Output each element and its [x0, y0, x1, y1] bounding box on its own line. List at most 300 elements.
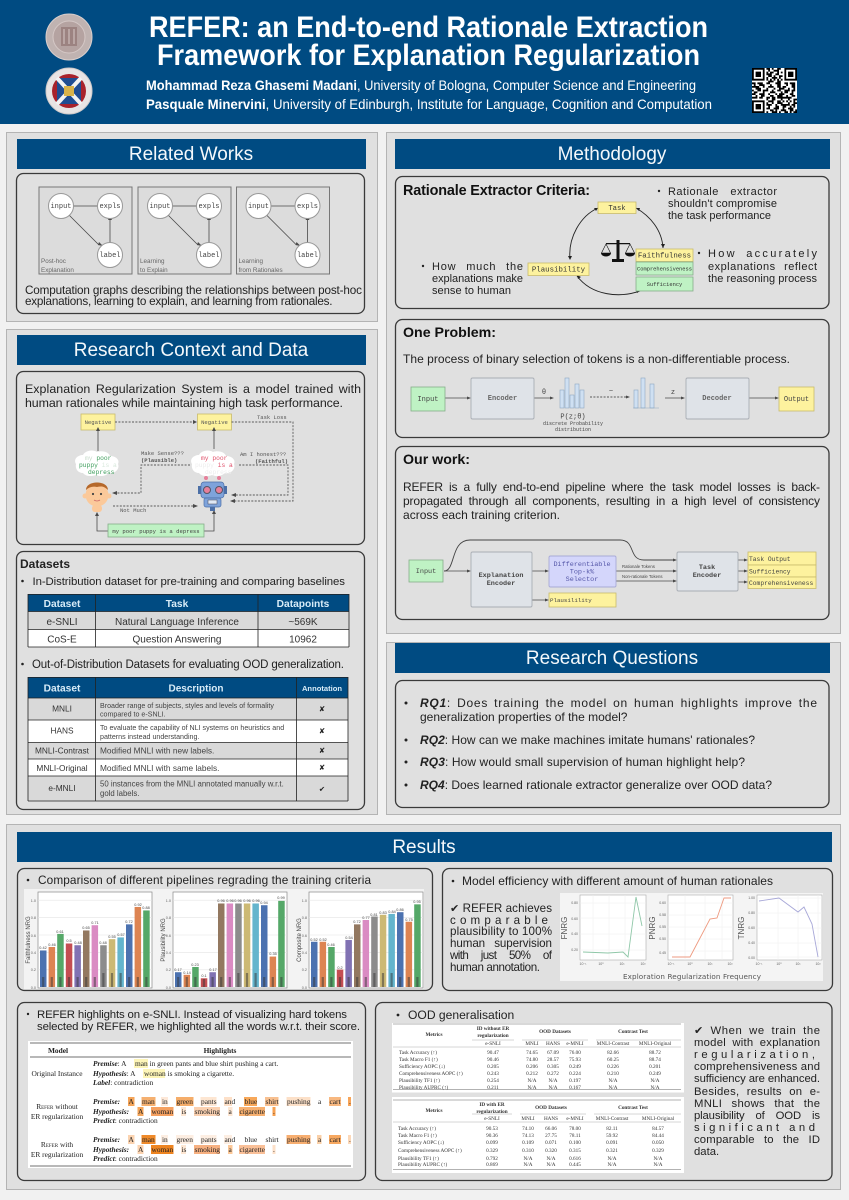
table: ID without ER regularization: N/A [651, 1085, 660, 1091]
text: refer pipeline description: across each training criterion. [403, 508, 560, 522]
pipeline diagram: non-differentiable: distribution [555, 427, 591, 433]
table: ID with ER regularization [393, 1100, 681, 1170]
line chart: TNRG: 0.80 [748, 911, 755, 915]
table: ID with ER regularization: Comprehensiveness AOPC (↑) [398, 1147, 462, 1154]
line chart: PNRG: 0.45 [659, 951, 666, 955]
line chart: TNRG: 10¹ [795, 962, 801, 966]
line chart: PNRG: PNRG [648, 916, 657, 940]
bar chart: composite NRG: 0.46 [327, 943, 335, 947]
bullet: faithfulness [698, 248, 818, 285]
table: out-of-distribution datasets: To evaluate the capability of NLI systems on heuristics and [100, 724, 284, 732]
bar chart: plausibility NRG: 0.96 [217, 899, 225, 903]
line chart: FNRG: 10¹ [619, 962, 625, 966]
bar chart: faithfulness NRG: 0.88 [142, 906, 150, 910]
table: ID without ER regularization: N/A [528, 1078, 537, 1084]
bullet: task performance [658, 186, 777, 222]
table: highlight examples: Model [48, 1046, 68, 1055]
pipeline diagram: non-differentiable [411, 378, 814, 433]
panel: results [6, 824, 840, 1190]
text: OOD findings: Besides, results on e- [694, 1086, 820, 1098]
diagram: explanation regularization system: Not Much [120, 507, 146, 514]
panel: one problem [396, 320, 829, 438]
table: ID without ER regularization: 74.80 [526, 1057, 538, 1063]
diagram: learning from rationales graph: Learning [238, 258, 264, 265]
text: OOD findings: significant and [694, 1122, 820, 1134]
bar chart: plausibility NRG: 0.96 [243, 899, 251, 903]
table: out-of-distribution datasets: ✘ [319, 704, 325, 714]
table: ID without ER regularization: 0.226 [607, 1064, 619, 1070]
row: refer without ER regularization: is [182, 1107, 187, 1116]
text: explanation regularization system: human rationales while maintaining high task performance. [25, 396, 343, 410]
table: out-of-distribution datasets: Annotation [302, 684, 342, 693]
row: refer with ER regularization: in [162, 1135, 168, 1144]
row: refer without ER regularization: A [128, 1097, 134, 1106]
line chart: TNRG: TNRG [737, 917, 746, 939]
icon: QR code [752, 68, 797, 113]
row: refer with ER regularization: man [142, 1135, 155, 1144]
row: refer without ER regularization: Predict: contradiction [93, 1116, 158, 1125]
cloud: machine rationale: my poor [201, 455, 228, 462]
text: OOD findings: data. [694, 1146, 719, 1158]
header banner [0, 0, 849, 124]
line chart: TNRG: 10² [815, 962, 821, 966]
table: ID with ER regularization: 0.329 [486, 1148, 498, 1154]
authors [146, 78, 712, 112]
diagram: learning to explain graph: to Explain [140, 267, 168, 274]
diagram: learning from rationales graph: expls [297, 203, 318, 211]
bullet: task performance: Rationale extractor [668, 186, 777, 198]
bullet: plausibility [422, 261, 523, 297]
bar chart: plausibility NRG: 0.8 [166, 916, 171, 920]
bar chart: composite NRG: 1.0 [302, 899, 307, 903]
bar chart: plausibility NRG: 0.35 [269, 952, 277, 956]
text: OOD findings: comparable to the ID [694, 1134, 820, 1146]
row: refer without ER regularization: pushing [287, 1097, 311, 1106]
text: refer achieves comparable plausibility: with just 50% of [449, 949, 553, 962]
diagram: post-hoc explanation graph: Explanation [41, 267, 74, 274]
table: ID with ER regularization: 66.06 [545, 1126, 557, 1132]
line chart: PNRG: 0.58 [659, 913, 666, 917]
cycle diagram: Faithfulness [638, 252, 691, 260]
bar chart: faithfulness NRG: 0.65 [82, 926, 90, 930]
line chart: FNRG: 10⁰ [598, 962, 604, 966]
text: refer achieves comparable plausibility [449, 902, 553, 974]
pipeline diagram: refer: Input [416, 568, 436, 576]
table: ID without ER regularization: Contrast Test [618, 1029, 648, 1035]
row: refer without ER regularization: a [228, 1107, 232, 1116]
bar chart: faithfulness NRG: 0.0 [31, 986, 36, 990]
table: ID without ER regularization: 0.205 [487, 1064, 499, 1070]
input sentence box: my poor puppy is a depress [112, 528, 200, 535]
table: out-of-distribution datasets: Dataset [44, 684, 81, 694]
pipeline diagram: non-differentiable: P(z;θ) [560, 414, 586, 422]
cloud: human rationale: puppy is a [79, 462, 117, 469]
diagram: explanation regularization system: (Faithful) [255, 458, 288, 465]
caption: computation graphs: explanations, learning to explain, and learning from rationales. [25, 295, 332, 308]
table: out-of-distribution datasets: ✘ [319, 746, 325, 755]
table: ID with ER regularization: 0.109 [522, 1140, 534, 1146]
logo: University of Edinburgh crest [46, 68, 92, 114]
panel: model efficiency [442, 868, 832, 990]
table: ID without ER regularization: 90.46 [487, 1057, 499, 1063]
heading: datasets: Datasets [20, 557, 70, 571]
logo: University of Bologna seal [46, 14, 92, 60]
table: highlight examples: Highlights [204, 1046, 237, 1055]
panel: one problem: The process of binary selection of tokens is a non-differentiable process. [403, 352, 790, 366]
row: refer with ER regularization: woman [152, 1145, 174, 1154]
row: refer without ER regularization: . [349, 1097, 351, 1106]
table: out-of-distribution datasets: compared to e-SNLI. [100, 710, 165, 718]
table: ID with ER regularization: Plausibility AUPRC (↑) [398, 1161, 448, 1168]
row: refer with ER regularization: blue [244, 1135, 258, 1144]
table: out-of-distribution datasets: MNLI [52, 704, 72, 714]
cloud: human rationale: depress [88, 469, 115, 476]
table: ID with ER regularization: N/A [654, 1156, 663, 1162]
table: ID with ER regularization: 84.57 [652, 1126, 664, 1132]
table: ID without ER regularization: Task Accuracy (↑) [399, 1049, 437, 1056]
bar chart: faithfulness NRG: 0.92 [134, 903, 142, 907]
cloud: machine rationale [191, 451, 235, 476]
panel: OOD generalisation: OOD generalisation [408, 1008, 514, 1022]
row: refer with ER regularization: . [349, 1135, 351, 1144]
pipeline diagram: refer: Task Output [749, 556, 791, 563]
line chart: PNRG: 0.60 [659, 901, 666, 905]
table: ID with ER regularization: HANS [544, 1116, 558, 1122]
pipeline diagram: refer: Differentiable [553, 561, 611, 569]
row: refer without ER regularization: cigarette [240, 1107, 266, 1116]
text: refer achieves comparable plausibility: plausibility to 100% [450, 925, 552, 938]
bar chart: composite NRG: 0.2 [337, 966, 343, 970]
table: ID without ER regularization: 0.243 [487, 1071, 499, 1077]
table: ID without ER regularization: 74.65 [526, 1050, 538, 1056]
panel: our work: Our work: [403, 452, 470, 468]
row: refer with ER regularization: pants [201, 1135, 217, 1144]
bar chart: plausibility NRG: 0.96 [234, 899, 242, 903]
table: ID without ER regularization: 90.47 [487, 1050, 499, 1056]
diagram: learning to explain graph: Learning [140, 258, 165, 265]
bar chart: composite NRG: 0.54 [345, 936, 353, 940]
cloud: human rationale [75, 451, 119, 476]
diagram: explanation regularization system: Negative [85, 419, 111, 426]
line chart: FNRG [560, 895, 646, 966]
heading: results: Results [392, 837, 456, 858]
bar chart: plausibility NRG: 0.2 [166, 968, 171, 972]
panel: pipeline comparison [18, 868, 432, 990]
row: refer without ER regularization: in [162, 1097, 168, 1106]
bar chart: plausibility NRG: 0.4 [166, 951, 171, 955]
panel: highlights: selected by REFER, we highlighted all the words w.r.t. their score. [37, 1021, 360, 1033]
pipeline diagram: non-differentiable: Output [784, 396, 809, 404]
authors: Mohammad Reza Ghasemi Madani, University of Bologna, Computer Science and Engineering [146, 78, 696, 93]
pipeline diagram: refer: Non-rationale Tokens [622, 574, 663, 579]
bar chart: composite NRG: 0.8 [302, 916, 307, 920]
cloud: human rationale: my poor [85, 455, 112, 462]
line chart: TNRG: 0.00 [748, 956, 755, 960]
bar chart: composite NRG: 0.83 [379, 911, 387, 915]
pipeline diagram: refer: Encoder [487, 580, 515, 588]
table: ID with ER regularization: MNLI [521, 1116, 535, 1122]
table: ID without ER regularization: N/A [528, 1085, 537, 1091]
bullet: plausibility: sense to human [432, 285, 511, 297]
bar chart: plausibility NRG: Plausibility NRG [161, 918, 167, 962]
line chart: FNRG: 10⁻¹ [580, 962, 587, 966]
diagram: learning from rationales graph [236, 187, 330, 274]
table: ID without ER regularization: 0.254 [487, 1078, 499, 1084]
table: in-distribution datasets [28, 594, 349, 647]
text: OOD findings: comprehensiveness and [694, 1061, 820, 1073]
diagram: post-hoc explanation graph: Post-hoc [41, 258, 66, 265]
row: refer without ER regularization [92, 1097, 351, 1125]
table: highlight examples: Refer without [36, 1102, 79, 1111]
table: ID without ER regularization: HANS [546, 1041, 560, 1047]
table: ID with ER regularization: Metrics [426, 1108, 442, 1114]
row: refer without ER regularization: smoking [194, 1107, 220, 1116]
row: refer with ER regularization: a [318, 1135, 322, 1144]
table: ID with ER regularization: Contrast Test [618, 1105, 648, 1111]
bullet: faithfulness: How accurately [708, 248, 818, 260]
table: ID with ER regularization: MNLI-Original [642, 1116, 675, 1122]
heading: research context and data: Research Context and Data [74, 340, 309, 361]
panel: rationale extractor criteria [396, 176, 829, 308]
heading: related works: Related Works [129, 144, 253, 165]
diagram: explanation regularization system: (Plausible) [141, 457, 177, 464]
diagram: learning from rationales graph: label [297, 252, 318, 260]
table: ID without ER regularization: e-SNLI [485, 1041, 501, 1047]
table: ID without ER regularization: 0.249 [649, 1071, 661, 1077]
bar chart: composite NRG: 0.4 [302, 951, 307, 955]
table: ID without ER regularization: N/A [549, 1078, 558, 1084]
bullet: task performance: the task performance [668, 210, 771, 222]
table: ID with ER regularization: 0.071 [545, 1140, 557, 1146]
table: ID without ER regularization: 75.93 [569, 1057, 581, 1063]
table: ID without ER regularization: N/A [609, 1085, 618, 1091]
table: ID with ER regularization: 27.75 [545, 1133, 557, 1139]
text: refer achieves comparable plausibility: comparable [450, 914, 552, 927]
row: refer without ER regularization: A [138, 1107, 144, 1116]
bullet: task performance: shouldn't compromise [668, 198, 777, 210]
table: out-of-distribution datasets: Modified MNLI with new labels. [100, 746, 214, 756]
question 1 [404, 696, 817, 724]
pipeline diagram: non-differentiable: discrete Probability [543, 421, 603, 427]
panel: methodology [386, 132, 840, 634]
row: original instance: Hypothesis: A [93, 1069, 135, 1078]
pipeline diagram: non-differentiable: Input [417, 396, 439, 404]
table: ID with ER regularization: N/A [524, 1162, 533, 1168]
table: ID without ER regularization: 0.211 [487, 1085, 499, 1091]
pipeline diagram: non-differentiable: Encoder [488, 395, 517, 403]
histogram: probability distribution [560, 378, 584, 408]
table: ID without ER regularization: Plausibility TF1 (↑) [399, 1077, 440, 1084]
text: refer pipeline description: REFER is a fully end-to-end pipeline where the task model losses is back- [403, 480, 820, 494]
table: out-of-distribution datasets: MNLI-Original [36, 763, 88, 773]
bar chart: composite NRG: 0.75 [405, 918, 413, 922]
diagram: explanation regularization system: Am I honest??? [240, 451, 286, 458]
line chart: FNRG: 10² [640, 962, 646, 966]
table: ID without ER regularization: Plausibility AUPRC (↑) [399, 1084, 449, 1091]
bar chart: plausibility NRG: 0.96 [252, 899, 260, 903]
line chart: PNRG: 10⁻¹ [668, 962, 675, 966]
text: refer pipeline description: propagated through all components, resulting in a high level of consistency [403, 494, 820, 508]
cycle diagram: Plausibility [532, 266, 586, 274]
diagram: post-hoc explanation graph: input [50, 203, 72, 211]
pipeline diagram: non-differentiable: θ [542, 389, 546, 397]
caption: computation graphs [25, 284, 362, 308]
row: refer with ER regularization [92, 1135, 351, 1163]
pipeline diagram: refer: Task [699, 564, 715, 572]
line chart: FNRG: FNRG [560, 917, 569, 939]
table: ID with ER regularization: 0.099 [486, 1140, 498, 1146]
bar chart: plausibility NRG: 0.94 [260, 901, 268, 905]
bar chart: faithfulness NRG: 0.4 [31, 951, 36, 955]
pipeline diagram: refer: Rationale Tokens [622, 564, 655, 569]
diagram: explanation regularization system: Make Sense??? [141, 450, 184, 457]
cloud: machine rationale: depress [205, 469, 232, 476]
table: ID without ER regularization: 60.25 [607, 1057, 619, 1063]
row: refer with ER regularization: Hypothesis: [92, 1145, 129, 1154]
bar chart: composite NRG: 0.2 [302, 968, 307, 972]
diagram: learning from rationales graph: input [248, 203, 269, 211]
bar chart: faithfulness NRG: 0.55 [108, 935, 116, 939]
table: ID without ER regularization: 82.66 [607, 1050, 619, 1056]
bar chart: faithfulness NRG: 1.0 [31, 899, 36, 903]
bar chart: faithfulness NRG: 0.48 [74, 941, 82, 945]
diagram: post-hoc explanation graph: expls [99, 203, 121, 211]
table: ID without ER regularization: 0.249 [569, 1064, 581, 1070]
table: ID without ER regularization: 88.72 [649, 1050, 661, 1056]
panel: research questions [386, 642, 840, 814]
table: ID without ER regularization: 0.305 [547, 1064, 559, 1070]
line chart: PNRG: 0.55 [659, 925, 666, 929]
table: out-of-distribution datasets: HANS [50, 726, 74, 736]
bar chart: composite NRG: 0.84 [388, 910, 396, 914]
text: refer achieves comparable plausibility: human annotation. [450, 961, 540, 974]
line chart: FNRG: 0.60 [571, 917, 578, 921]
row: original instance: Label: contradiction [92, 1078, 153, 1087]
bar chart: plausibility NRG: 0.96 [226, 899, 234, 903]
table: in-distribution datasets: Dataset [44, 599, 81, 610]
row: refer with ER regularization: and [224, 1135, 235, 1144]
bar chart: composite NRG: 0.72 [353, 920, 361, 924]
row: refer with ER regularization: shirt [266, 1135, 280, 1144]
line chart: TNRG: 1.00 [748, 896, 755, 900]
row: refer without ER regularization: . [273, 1107, 275, 1116]
row: refer without ER regularization: and [224, 1097, 235, 1106]
diagram: post-hoc explanation graph: label [99, 252, 121, 260]
row: refer with ER regularization: Predict: contradiction [93, 1154, 158, 1163]
row: refer without ER regularization: Hypothesis: [92, 1107, 129, 1116]
table: out-of-distribution datasets: 50 instances from the MNLI annotated manually w.r.t. [100, 780, 284, 788]
row: refer with ER regularization: . [273, 1145, 275, 1154]
line chart: TNRG: 10⁻¹ [756, 962, 763, 966]
panel: our work [396, 446, 829, 620]
title: REFER: an End-to-end Rationale Extraction [149, 11, 708, 44]
bullet: faithfulness: the reasoning process [708, 273, 818, 285]
bar chart: composite NRG: 0.86 [396, 908, 404, 912]
table: ID with ER regularization: MNLI-Contrast [596, 1116, 629, 1122]
row: refer without ER regularization: man [142, 1097, 155, 1106]
table: ID without ER regularization: N/A [651, 1078, 660, 1084]
table: ID with ER regularization: ID with ER [479, 1102, 505, 1108]
bar chart: plausibility NRG: 0.1 [201, 974, 207, 978]
table: ID with ER regularization: 90.36 [486, 1133, 498, 1139]
table: out-of-distribution datasets: ✘ [319, 726, 325, 736]
table: ID with ER regularization: 0.315 [569, 1148, 581, 1154]
table: ID with ER regularization: 0.445 [569, 1162, 581, 1168]
pipeline diagram: non-differentiable: z [671, 389, 675, 397]
row: refer without ER regularization: Premise: [93, 1097, 120, 1106]
table: ID with ER regularization: 0.050 [652, 1140, 664, 1146]
question 3: RQ3: How would small supervision of human highlight help? [420, 755, 745, 769]
table: ID with ER regularization: N/A [654, 1162, 663, 1168]
table: ID without ER regularization [393, 1024, 681, 1091]
bar chart: faithfulness NRG: 0.61 [56, 930, 64, 934]
table: ID without ER regularization: MNLI-Original [639, 1041, 672, 1047]
row: refer with ER regularization: Premise: [93, 1135, 120, 1144]
bar chart: plausibility NRG [161, 892, 287, 990]
row: refer with ER regularization: A [128, 1135, 134, 1144]
table: ID with ER regularization: 0.321 [606, 1148, 618, 1154]
table: in-distribution datasets: Datapoints [277, 599, 330, 610]
table: highlight examples: Original Instance [31, 1069, 83, 1078]
table: ID with ER regularization: e-SNLI [484, 1116, 500, 1122]
diagram: learning to explain graph: input [149, 203, 171, 211]
table: ID with ER regularization: 0.310 [522, 1148, 534, 1154]
panel: OOD generalisation [376, 1002, 832, 1180]
table: ID without ER regularization: 76.00 [569, 1050, 581, 1056]
table: ID without ER regularization: N/A [549, 1085, 558, 1091]
text: OOD findings: plausibility of OOD is [694, 1110, 820, 1122]
table: ID without ER regularization: N/A [609, 1078, 618, 1084]
row: original instance: man in green pants and blue shirt pushing a cart. [135, 1059, 278, 1068]
table: ID with ER regularization: Task Macro F1 (↑) [398, 1132, 437, 1139]
table: ID without ER regularization: Metrics [426, 1032, 442, 1038]
table: ID without ER regularization: 88.74 [649, 1057, 661, 1063]
diagram: explanation regularization system [75, 414, 293, 537]
title [149, 11, 708, 72]
row: refer with ER regularization: smoking [194, 1145, 220, 1154]
bar chart: composite NRG [297, 892, 423, 990]
row: original instance: woman is smoking a cigarette. [144, 1069, 234, 1078]
table: ID with ER regularization: 82.11 [606, 1126, 618, 1132]
row: refer without ER regularization: cart [330, 1097, 342, 1106]
bar chart: composite NRG: 0.6 [302, 934, 307, 938]
cycle diagram: Task [608, 205, 626, 213]
bar chart: faithfulness NRG [26, 892, 152, 990]
line chart: TNRG: 10⁰ [776, 962, 782, 966]
table: ID without ER regularization: MNLI-Contrast [597, 1041, 630, 1047]
diagram: learning to explain graph [138, 187, 231, 274]
table: ID without ER regularization: 0.206 [526, 1064, 538, 1070]
table: ID with ER regularization: 74.13 [522, 1133, 534, 1139]
table: ID with ER regularization: 0.616 [569, 1156, 581, 1162]
text: OOD findings: MNLI shows that the [694, 1098, 820, 1110]
table: ID without ER regularization: Comprehensiveness AOPC (↑) [399, 1070, 463, 1077]
panel: one problem: One Problem: [403, 325, 496, 341]
line chart: TNRG [737, 895, 822, 966]
table: ID with ER regularization: N/A [547, 1156, 556, 1162]
diagram: post-hoc explanation graph [39, 187, 132, 274]
table: ID with ER regularization: 84.44 [652, 1133, 664, 1139]
diagram: learning from rationales graph: from Rationales [238, 267, 283, 274]
pipeline diagram: refer: Encoder [693, 572, 721, 580]
row: refer with ER regularization: green [176, 1135, 193, 1144]
panel: research context and data [6, 330, 378, 814]
row: refer without ER regularization: woman [152, 1107, 174, 1116]
bar chart: faithfulness NRG: 0.8 [31, 916, 36, 920]
panel: pipeline comparison: Comparison of different pipelines regrading the training criteria [38, 873, 371, 887]
table: ID with ER regularization: 0.792 [486, 1156, 498, 1162]
bar chart: plausibility NRG: 0.17 [209, 968, 217, 972]
